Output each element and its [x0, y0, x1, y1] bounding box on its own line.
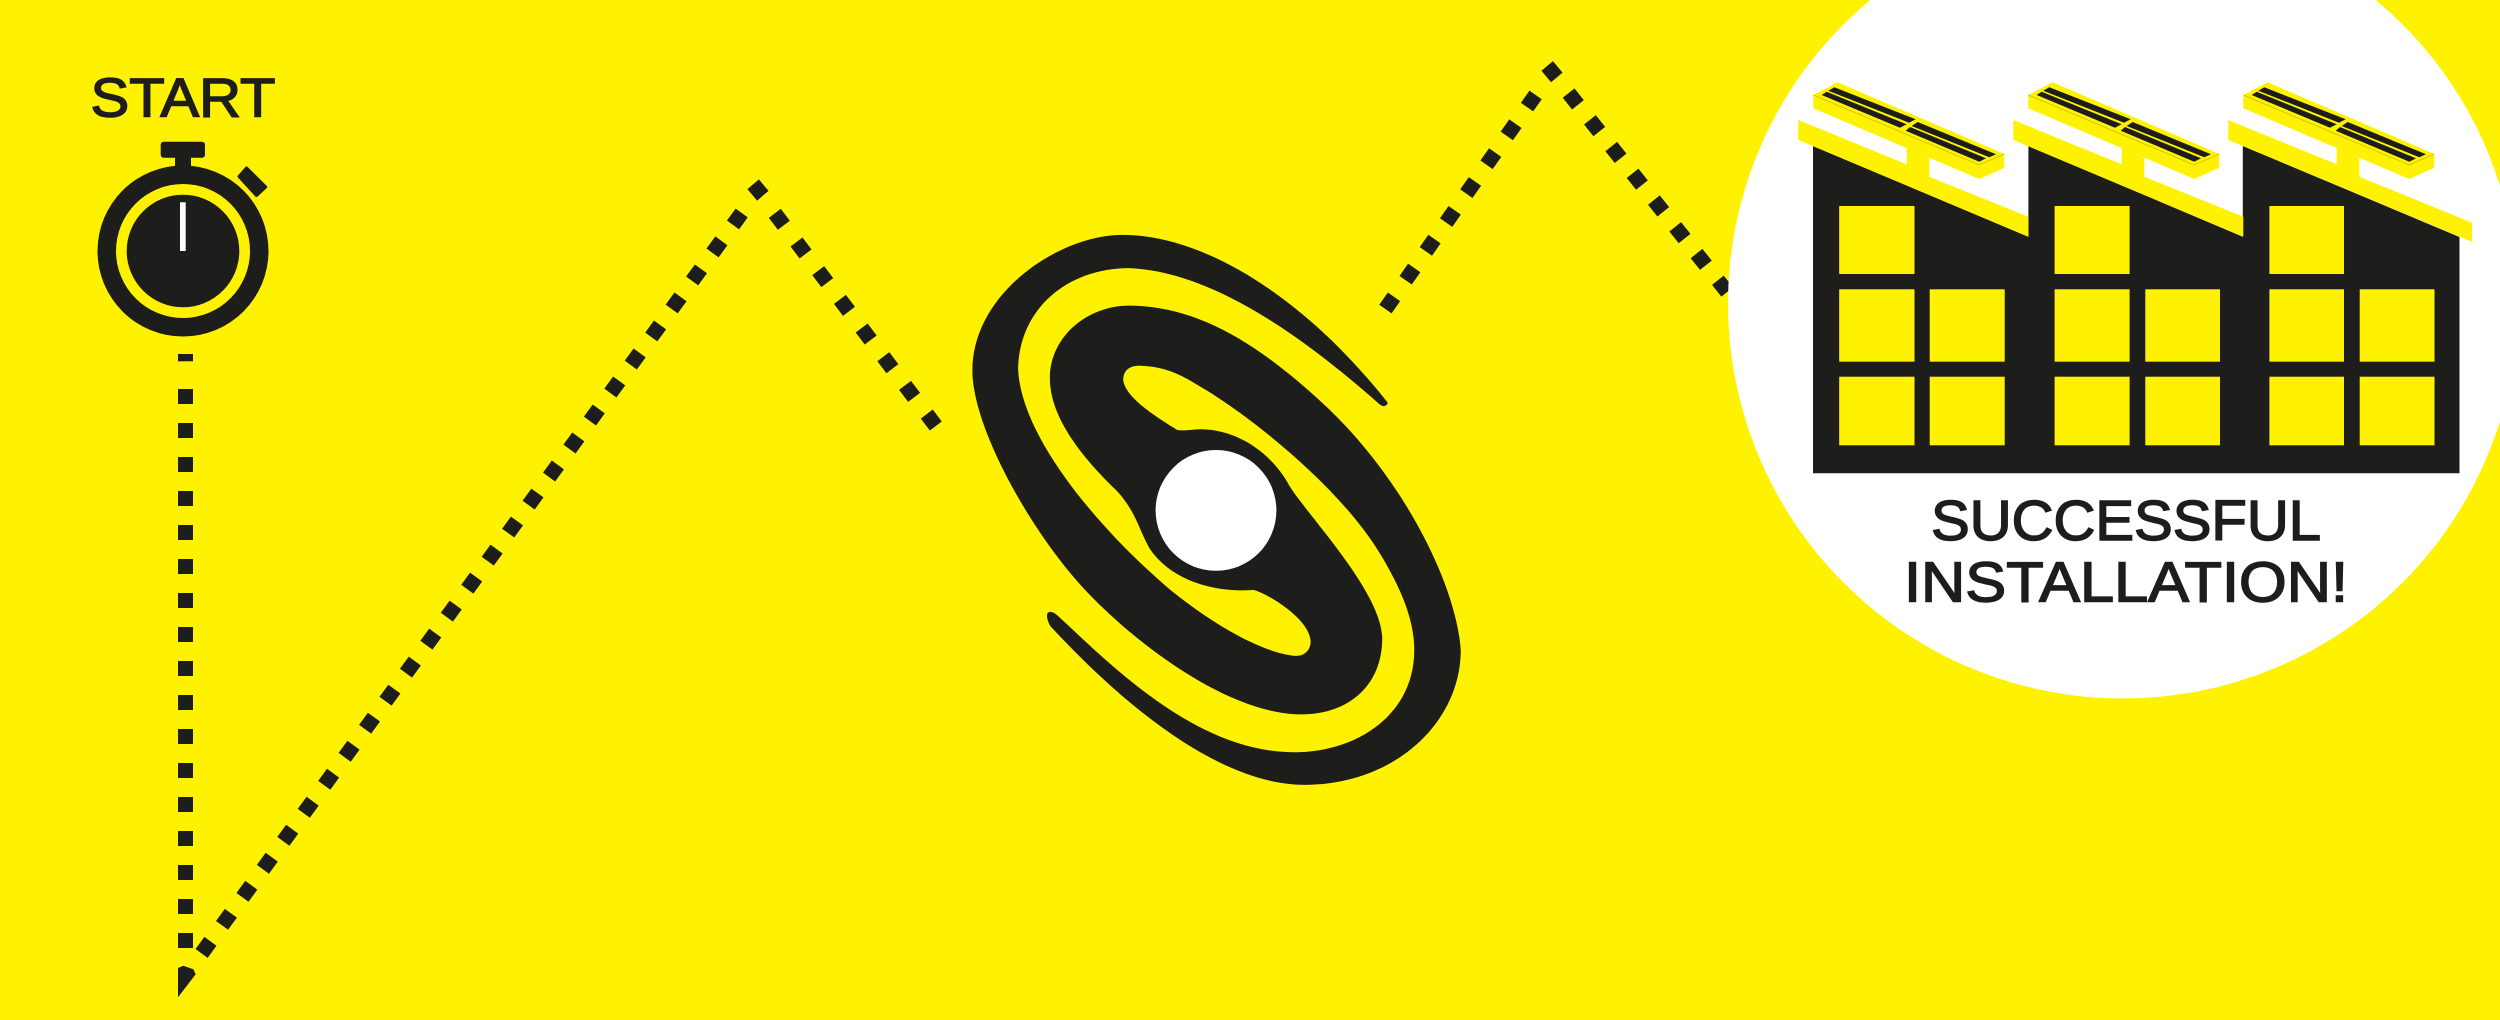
dotted path: first peak marker — [747, 179, 769, 201]
swirl obstacle symbol — [972, 235, 1461, 785]
factory section 2 roof and panel — [2013, 82, 2243, 237]
caption: successful installation — [1904, 489, 2348, 614]
arrow tip: path corner at bottom — [178, 966, 196, 997]
white goal circle — [1728, 0, 2500, 698]
icon: stopwatch — [98, 142, 268, 336]
factory windows — [1839, 206, 2434, 445]
icon: factory with solar panels — [1798, 82, 2472, 473]
label: start: START — [90, 66, 276, 128]
dotted path: rise out of swirl to second peak — [1385, 95, 1536, 309]
dotted path: second peak marker — [1541, 61, 1563, 82]
factory section 3 roof and panel — [2228, 82, 2472, 242]
caption: successful installation: INSTALLATION! — [1904, 550, 2348, 614]
dotted path: vertical descent from stopwatch — [178, 354, 193, 948]
caption: successful installation: SUCCESSFUL — [1931, 489, 2321, 552]
factory body — [1813, 146, 2460, 473]
dotted path: long rise to first peak — [202, 213, 742, 953]
factory section 1 roof and panel — [1798, 82, 2028, 237]
dotted path: descent into swirl — [775, 213, 936, 426]
dotted path: descent to goal circle — [1569, 93, 1727, 292]
